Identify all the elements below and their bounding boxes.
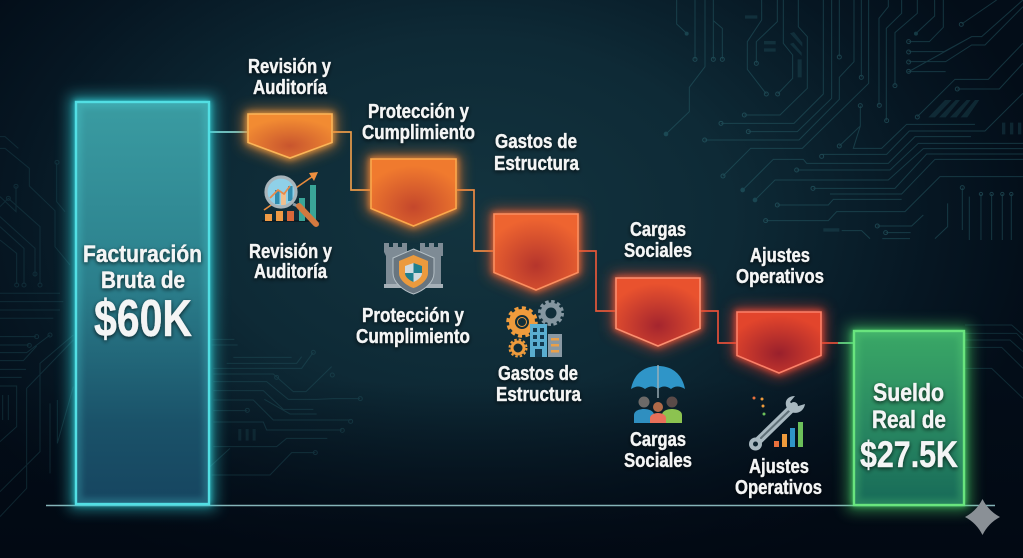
upper label: Revisión y Auditoría bbox=[248, 56, 332, 99]
upper label: Cargas Sociales bbox=[624, 219, 692, 262]
lower label: Revisión y Auditoría bbox=[249, 241, 333, 283]
upper label: Protección y Cumplimiento: Protección y bbox=[368, 101, 470, 123]
upper label: Revisión y Auditoría: Auditoría bbox=[253, 77, 328, 99]
upper label: Gastos de Estructura bbox=[494, 131, 580, 175]
bar label: Facturación bbox=[83, 241, 202, 268]
upper label: Gastos de Estructura: Gastos de bbox=[495, 131, 577, 153]
connector lines between steps bbox=[210, 132, 853, 343]
bar label bbox=[83, 241, 202, 348]
upper label: Gastos de Estructura: Estructura bbox=[494, 153, 580, 175]
lower label: Ajustes Operativos bbox=[735, 456, 822, 499]
circuit pattern: lower left and middle bbox=[0, 333, 362, 517]
lower label: Gastos de Estructura: Estructura bbox=[496, 384, 582, 406]
lower label: Gastos de Estructura: Gastos de bbox=[498, 363, 578, 385]
step 4 pentagon bbox=[615, 277, 701, 347]
bar label bbox=[860, 379, 958, 475]
upper label: Revisión y Auditoría: Revisión y bbox=[248, 56, 332, 78]
step 1 pentagon bbox=[247, 113, 333, 159]
circuit pattern: lower right bbox=[965, 325, 1023, 398]
icon: umbrella over family bbox=[631, 365, 685, 423]
upper label: Ajustes Operativos: Operativos bbox=[736, 266, 824, 288]
bar label: $60K bbox=[94, 290, 192, 348]
lower label: Cargas Sociales: Cargas bbox=[630, 429, 686, 451]
icon: sparkle watermark bbox=[965, 499, 1000, 535]
lower label: Cargas Sociales: Sociales bbox=[624, 450, 692, 472]
circuit pattern: upper right bbox=[664, 0, 1023, 240]
bar label: Sueldo bbox=[873, 379, 944, 407]
upper label: Ajustes Operativos bbox=[736, 245, 824, 288]
baseline axis bbox=[46, 504, 995, 506]
step 5 pentagon bbox=[736, 311, 822, 374]
bar label: $27.5K bbox=[860, 434, 958, 475]
lower label: Ajustes Operativos: Ajustes bbox=[749, 456, 809, 478]
panel: net salary bar bbox=[851, 329, 967, 507]
bar label: Real de bbox=[872, 406, 946, 434]
lower label: Ajustes Operativos: Operativos bbox=[735, 477, 822, 499]
lower label: Protección y Cumplimiento: Protección y bbox=[362, 305, 465, 327]
icon: gears and buildings bbox=[508, 302, 562, 357]
lower label: Revisión y Auditoría: Auditoría bbox=[254, 261, 328, 283]
lower label: Protección y Cumplimiento: Cumplimiento bbox=[356, 326, 470, 348]
upper label: Protección y Cumplimiento bbox=[362, 101, 475, 144]
upper label: Protección y Cumplimiento: Cumplimiento bbox=[362, 122, 475, 144]
step 3 pentagon bbox=[493, 213, 579, 291]
icon: wrench and bars bbox=[749, 396, 805, 450]
upper label: Ajustes Operativos: Ajustes bbox=[750, 245, 810, 267]
lower label: Gastos de Estructura bbox=[496, 363, 582, 406]
lower label: Cargas Sociales bbox=[624, 429, 692, 472]
circuit pattern: left bbox=[0, 137, 70, 318]
step 2 pentagon bbox=[370, 158, 457, 227]
panel: gross revenue bar bbox=[73, 99, 212, 506]
icon: castle with shield bbox=[384, 243, 443, 294]
icon: magnifying glass over chart bbox=[262, 172, 320, 224]
upper label: Cargas Sociales: Sociales bbox=[624, 240, 692, 262]
lower label: Protección y Cumplimiento bbox=[356, 305, 470, 348]
upper label: Cargas Sociales: Cargas bbox=[630, 219, 686, 241]
lower label: Revisión y Auditoría: Revisión y bbox=[249, 241, 333, 263]
bar label: Bruta de bbox=[101, 267, 185, 294]
